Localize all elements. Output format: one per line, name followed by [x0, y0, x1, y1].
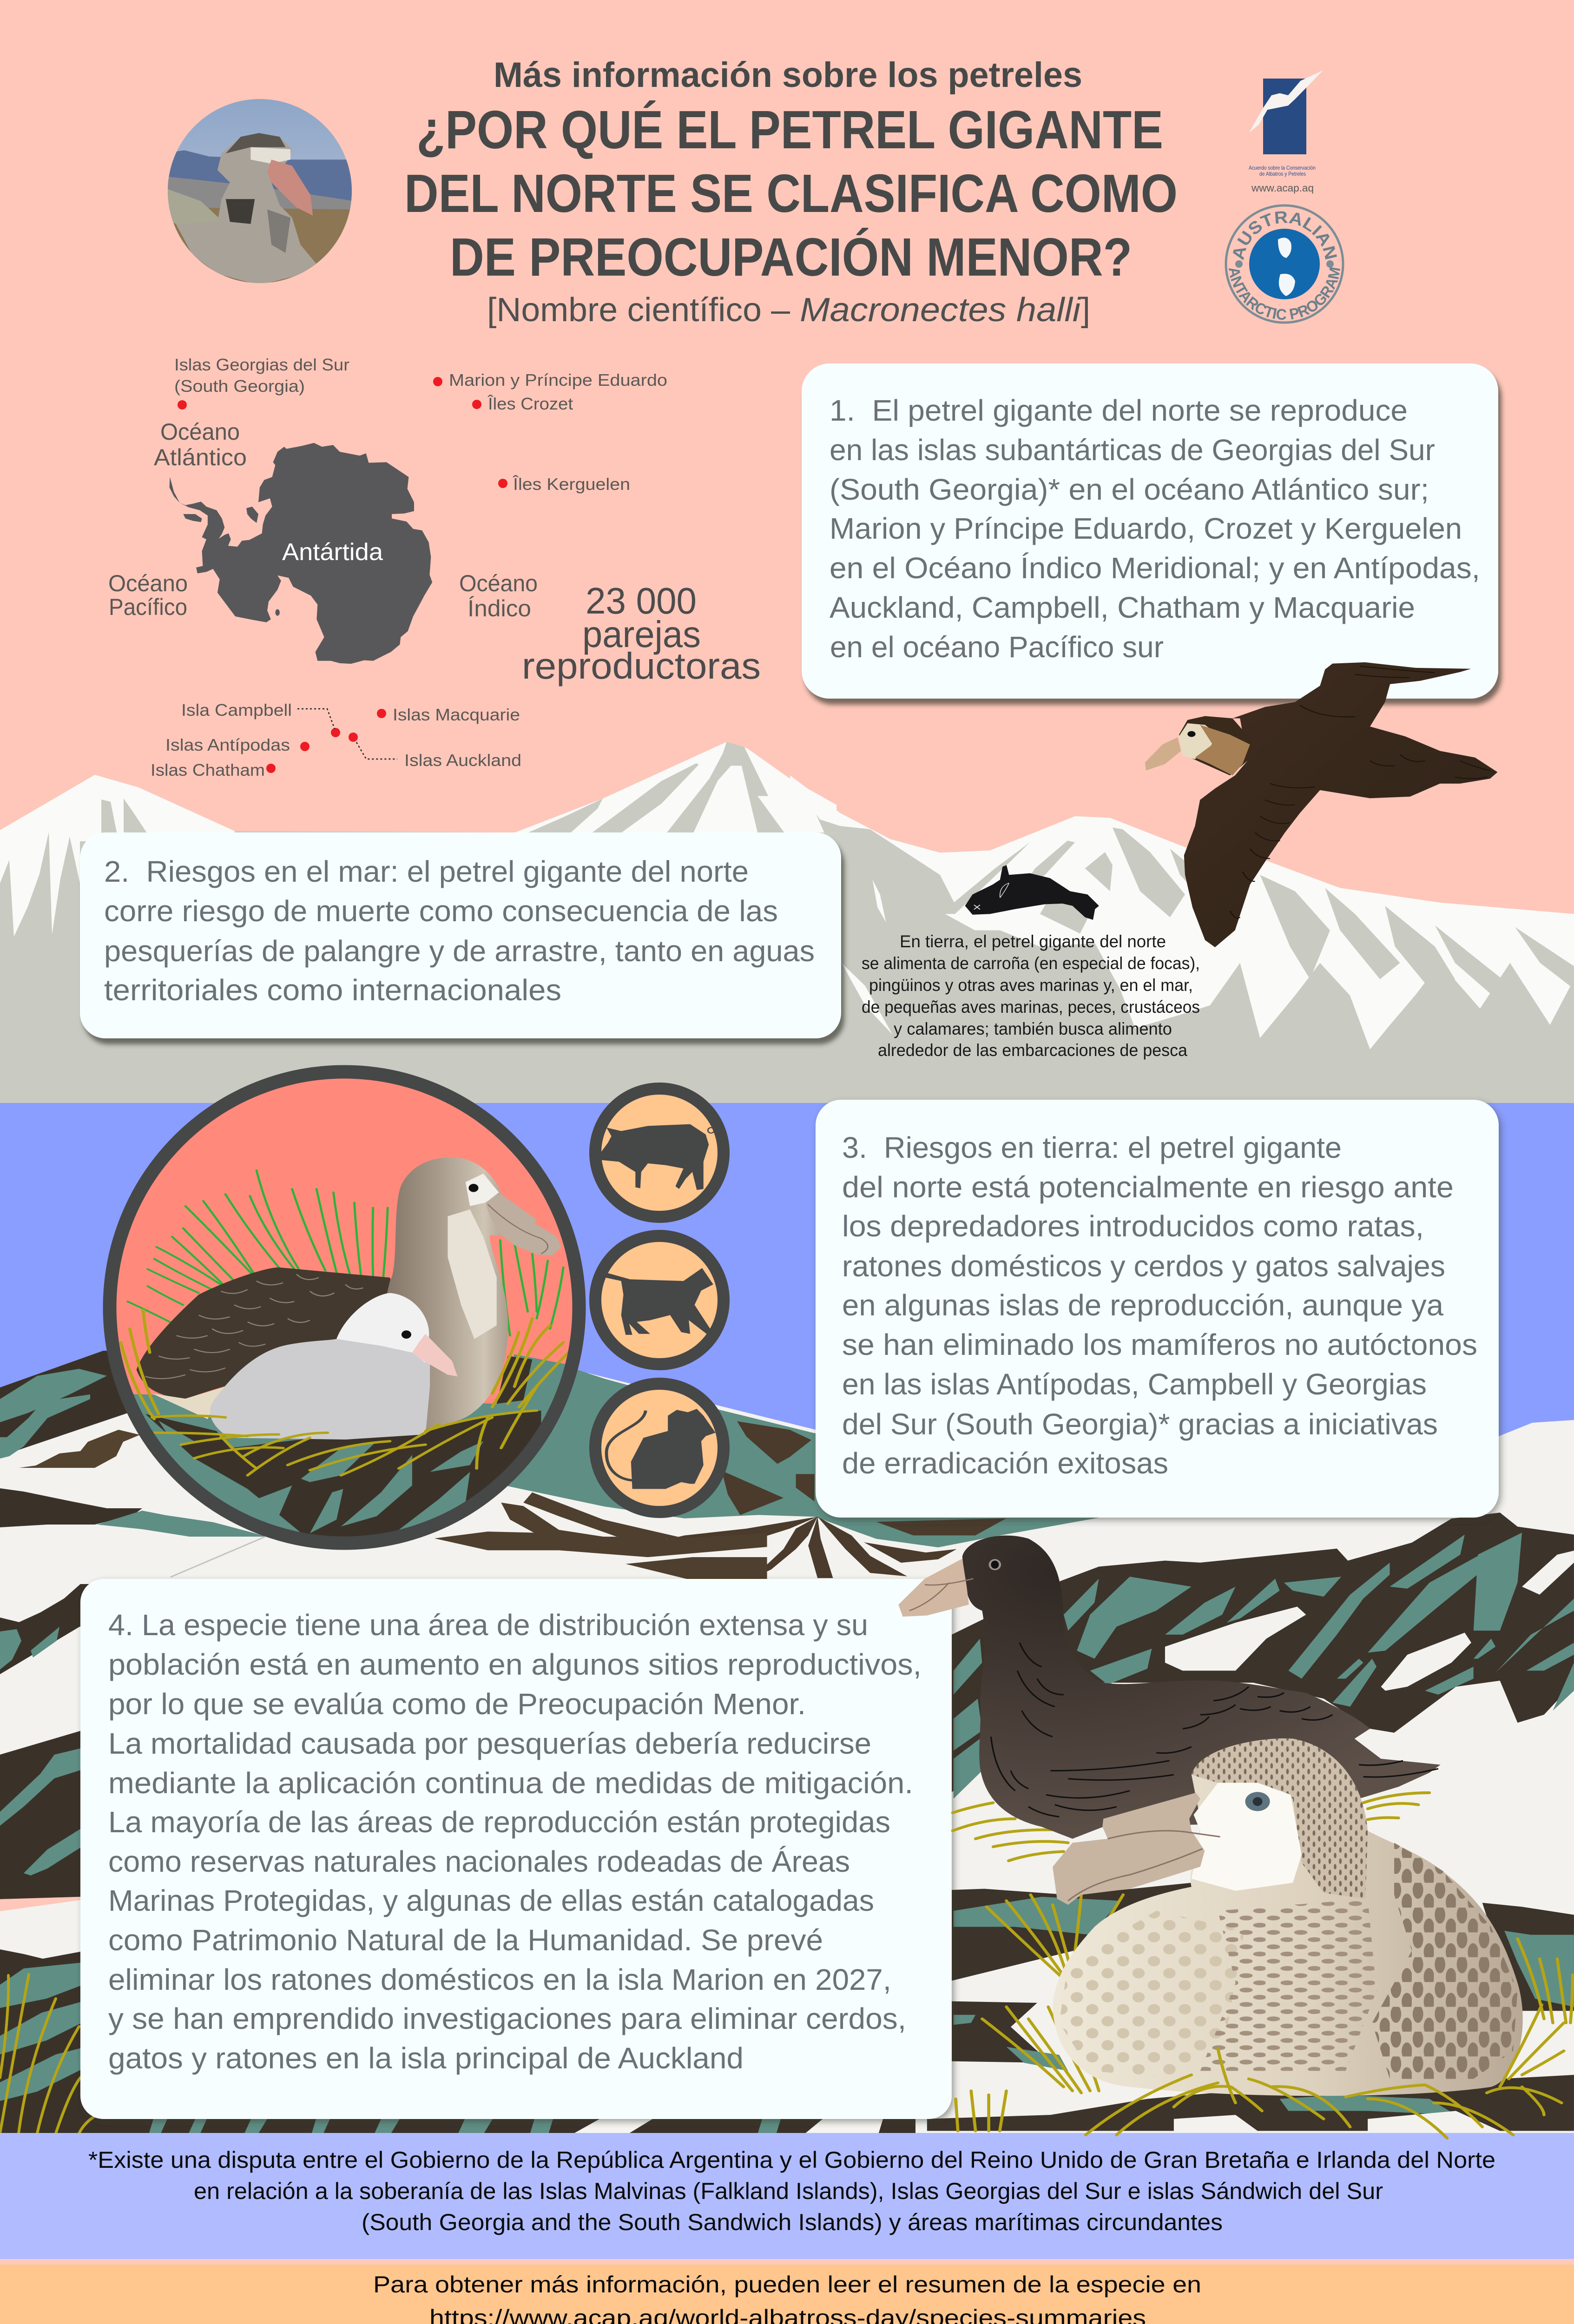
- logo: ACAP: [1249, 70, 1323, 194]
- site labels: Islas Georgias del Sur: [174, 355, 349, 374]
- site labels: Islas Chatham: [151, 760, 265, 779]
- logo: Australian Antarctic Program: [1225, 205, 1343, 323]
- panel: card 3 risks on land: [816, 1100, 1499, 1518]
- bottom strip below card 4: [79, 2092, 915, 2134]
- panel: card 2 risks at sea: 2. Riesgos en el mar: el petrel gigante del norte: [104, 855, 749, 888]
- panel: card 4 conservation status: como Patrimonio Natural de la Humanidad. Se prevé: [108, 1923, 823, 1957]
- site labels: Islas Auckland: [404, 751, 521, 770]
- background: salmon sky: [0, 0, 1574, 1116]
- text block: diet caption: [862, 932, 1200, 1060]
- scientific name: [Nombre científico –: [487, 291, 790, 329]
- illustration: roundel with adult and chick: [110, 1072, 586, 1543]
- footer: disputed sovereignty note: en relación a la soberanía de las Islas Malvinas (Falkland Islands), Islas Georgias del Sur e islas Sándwich del Sur: [194, 2178, 1383, 2204]
- divider strip and orange band: Para obtener más información, pueden leer el resumen de la especie en: [373, 2271, 1201, 2298]
- site labels: (South Georgia): [174, 376, 305, 396]
- icon: cat: [595, 1236, 724, 1364]
- site labels: Isla Campbell: [181, 700, 292, 720]
- scientific name: ]: [1081, 291, 1090, 329]
- leader lines: [297, 709, 397, 759]
- logo: Australian Antarctic Program: AUSTRALIAN: [1228, 207, 1341, 262]
- icon: pig: [595, 1089, 724, 1217]
- right side rock and tussock: [927, 1512, 1574, 2131]
- footer: disputed sovereignty note: *Existe una disputa entre el Gobierno de la República Argentina y el Gobierno del Reino Unido de Gran Bretaña e Irlanda del Norte: [88, 2147, 1495, 2173]
- stat: breeding pairs: 23 000: [586, 580, 697, 621]
- icon: seal carrion: [965, 865, 1099, 920]
- main title: [404, 99, 1178, 287]
- panel: card 3 risks on land: de erradicación exitosas: [842, 1446, 1168, 1480]
- wing of adult: [137, 1268, 392, 1399]
- stat: breeding pairs: parejas: [582, 614, 701, 655]
- kicker: Más información sobre los petreles: [494, 55, 1082, 95]
- panel: card 3 risks on land: se han eliminado los mamíferos no autóctonos: [842, 1328, 1477, 1361]
- adult head, neck, breast: [381, 1157, 510, 1431]
- panel: card 4 conservation status: La mortalidad causada por pesquerías debería reducirse: [108, 1727, 871, 1760]
- site labels: Îles Crozet: [487, 394, 573, 413]
- olive grass in front: [1086, 2005, 1564, 2138]
- panel: card 4 conservation status: como reservas naturales nacionales rodeadas de Áreas: [108, 1845, 850, 1878]
- footer: disputed sovereignty note: [0, 2133, 1574, 2259]
- panel: card 1 breeding range: [802, 363, 1498, 699]
- panel: card 4 conservation status: y se han emprendido investigaciones para eliminar cerdos,: [108, 2002, 906, 2035]
- ocean labels: Océano: [459, 570, 538, 596]
- green grass fan: [127, 1170, 563, 1335]
- text block: diet caption: de pequeñas aves marinas, peces, crustáceos: [862, 997, 1200, 1017]
- panel: card 3 risks on land: en las islas Antípodas, Campbell y Georgias: [842, 1367, 1427, 1401]
- text block: diet caption: pingüinos y otras aves marinas y, en el mar,: [869, 976, 1193, 995]
- panel: card 4 conservation status: [80, 1579, 952, 2119]
- chick: [210, 1339, 430, 1439]
- main title: ¿POR QUÉ EL PETREL GIGANTE: [416, 99, 1163, 160]
- panel: card 2 risks at sea: [80, 832, 841, 1038]
- scientific name: [487, 291, 1090, 329]
- logo: ACAP: www.acap.aq: [1251, 182, 1314, 194]
- panel: card 3 risks on land: del Sur (South Georgia)* gracias a iniciativas: [842, 1407, 1438, 1441]
- roundel ground: [133, 1354, 565, 1532]
- grey snowy mountains: [0, 742, 1574, 1116]
- stat: breeding pairs: reproductoras: [522, 645, 761, 687]
- site labels: Islas Antípodas: [165, 735, 290, 754]
- heading: [404, 55, 1178, 329]
- panel: card 1 breeding range: en el océano Pacífico sur: [830, 630, 1164, 664]
- panel: card 4 conservation status: población está en aumento en algunos sitios reproductivos,: [108, 1648, 922, 1681]
- panel: card 3 risks on land: 3. Riesgos en tierra: el petrel gigante: [842, 1131, 1342, 1164]
- ocean labels: Océano: [160, 419, 240, 445]
- site labels: [151, 355, 667, 779]
- panel: card 2 risks at sea: corre riesgo de muerte como consecuencia de las: [104, 894, 778, 928]
- left olive grass: [0, 1974, 112, 2133]
- logo: ACAP: Acuerdo sobre la Conservación: [1249, 165, 1316, 171]
- panel: card 1 breeding range: en las islas subantárticas de Georgias del Sur: [830, 433, 1435, 467]
- site labels: Islas Macquarie: [393, 705, 520, 724]
- logo: Australian Antarctic Program: ANTARCTIC PROGRAM: [1225, 265, 1343, 323]
- panel: card 1 breeding range: 1. El petrel gigante del norte se reproduce: [830, 394, 1408, 427]
- site labels: Marion y Príncipe Eduardo: [449, 370, 667, 390]
- logo: ACAP: de Albatros y Petreles: [1259, 171, 1306, 177]
- scientific name: Macronectes halli: [800, 291, 1081, 329]
- photo: petrel head in circle: [164, 99, 355, 285]
- panel: card 4 conservation status: eliminar los ratones domésticos en la isla Marion en 2027,: [108, 1963, 891, 1996]
- blue band: sea: [0, 1103, 1574, 1521]
- footer: disputed sovereignty note: (South Georgia and the South Sandwich Islands) y áreas marítimas circundantes: [362, 2209, 1223, 2235]
- site markers: [178, 377, 507, 773]
- panel: card 3 risks on land: los depredadores introducidos como ratas,: [842, 1209, 1424, 1243]
- label: Antártida: Antártida: [282, 539, 383, 566]
- ocean labels: Atlántico: [154, 444, 247, 470]
- ocean labels: Pacífico: [109, 594, 187, 620]
- panel: card 4 conservation status: Marinas Protegidas, y algunas de ellas están catalogadas: [108, 1884, 874, 1917]
- divider strip and orange band: [0, 2259, 1574, 2324]
- icon: mouse: [595, 1384, 724, 1512]
- panel: card 2 risks at sea: territoriales como internacionales: [104, 973, 561, 1007]
- left rock band: [0, 1584, 93, 2134]
- panel: card 2 risks at sea: pesquerías de palangre y de arrastre, tanto en aguas: [104, 934, 815, 968]
- main title: DEL NORTE SE CLASIFICA COMO: [404, 163, 1178, 224]
- ocean labels: [108, 419, 538, 621]
- panel: card 4 conservation status: por lo que se evalúa como de Preocupación Menor.: [108, 1687, 806, 1721]
- site labels: Îles Kerguelen: [513, 475, 630, 494]
- text block: diet caption: En tierra, el petrel gigante del norte: [900, 932, 1166, 951]
- panel: card 1 breeding range: (South Georgia)* en el océano Atlántico sur;: [830, 473, 1429, 506]
- illustration: dark and pale sitting petrels: [898, 1536, 1573, 2138]
- dark petrel: [962, 1536, 1441, 1839]
- panel: card 4 conservation status: La mayoría de las áreas de reproducción están protegidas: [108, 1805, 890, 1839]
- map: Antarctica and breeding sites: [108, 355, 761, 779]
- ocean labels: Índico: [468, 595, 531, 621]
- panel: card 3 risks on land: en algunas islas de reproducción, aunque ya: [842, 1288, 1443, 1322]
- panel: card 1 breeding range: Auckland, Campbell, Chatham y Macquarie: [830, 591, 1415, 624]
- Antarctica silhouette: [170, 443, 432, 664]
- text block: diet caption: se alimenta de carroña (en especial de focas),: [862, 954, 1200, 973]
- olive grass behind birds: [953, 1793, 1573, 2131]
- pale petrel body: [1053, 1738, 1523, 2096]
- text block: diet caption: alrededor de las embarcaciones de pesca: [878, 1041, 1187, 1060]
- panel: card 4 conservation status: gatos y ratones en la isla principal de Auckland: [108, 2041, 744, 2075]
- panel: card 1 breeding range: en el Océano Índico Meridional; y en Antípodas,: [830, 551, 1480, 585]
- panel: card 3 risks on land: del norte está potencialmente en riesgo ante: [842, 1170, 1454, 1204]
- panel: card 4 conservation status: mediante la aplicación continua de medidas de mitigación.: [108, 1766, 913, 1800]
- panel: card 4 conservation status: 4. La especie tiene una área de distribución extensa y su: [108, 1608, 868, 1642]
- olive nest grass: [121, 1310, 570, 1475]
- main title: DE PREOCUPACIÓN MENOR?: [450, 227, 1132, 287]
- lower landscape: snow, rock and tussock: [0, 1351, 1574, 2134]
- ocean labels: Océano: [108, 570, 188, 596]
- illustration: flying petrel: [1145, 662, 1497, 947]
- panel: card 3 risks on land: ratones domésticos y cerdos y gatos salvajes: [842, 1249, 1445, 1283]
- stat: breeding pairs: [522, 580, 761, 687]
- text block: diet caption: y calamares; también busca alimento: [894, 1019, 1172, 1038]
- panel: card 1 breeding range: Marion y Príncipe Eduardo, Crozet y Kerguelen: [830, 512, 1462, 545]
